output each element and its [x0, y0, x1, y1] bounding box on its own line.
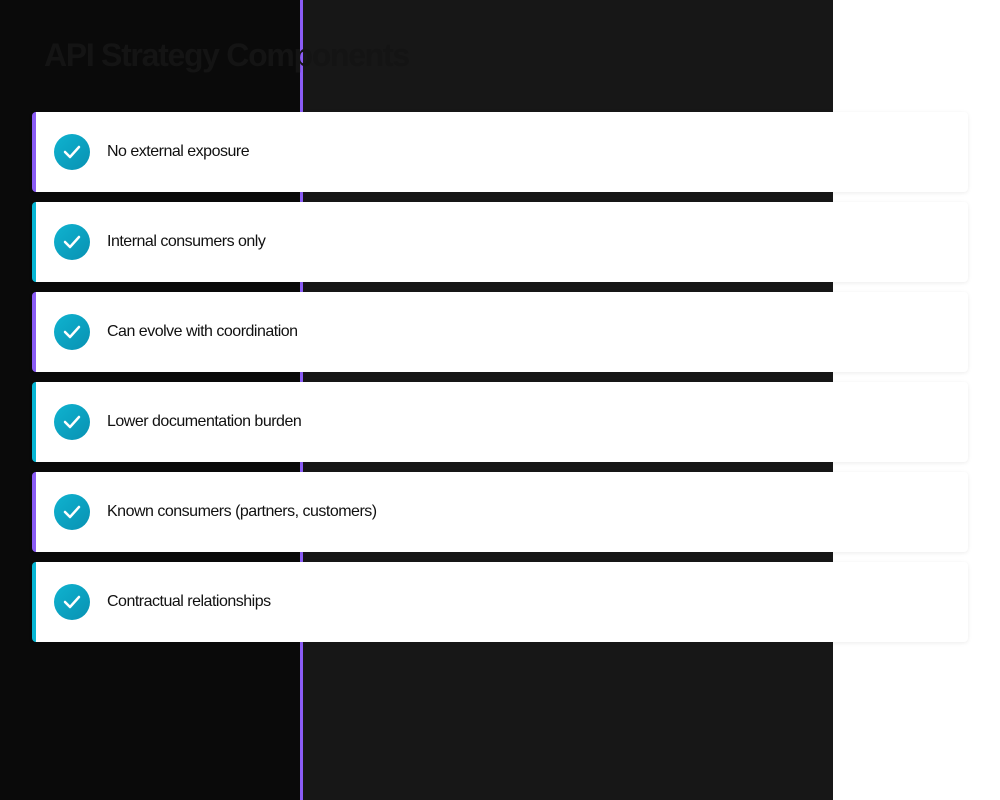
icon: check — [54, 404, 90, 440]
icon: check — [54, 584, 90, 620]
card: no external exposure — [32, 112, 968, 192]
card: internal consumers — [32, 202, 968, 282]
card: documentation — [32, 382, 968, 462]
title: API Strategy Components — [44, 37, 409, 73]
icon: check — [54, 494, 90, 530]
card: internal consumers: Internal consumers only — [107, 233, 265, 250]
icon: check — [54, 314, 90, 350]
card: evolve: Can evolve with coordination — [107, 323, 298, 340]
icon: check — [54, 224, 90, 260]
card: known consumers — [32, 472, 968, 552]
card: contractual — [32, 562, 968, 642]
card: known consumers: Known consumers (partners, customers) — [107, 503, 377, 520]
card: contractual: Contractual relationships — [107, 593, 271, 610]
card: documentation: Lower documentation burden — [107, 413, 301, 430]
card: no external exposure: No external exposure — [107, 143, 249, 160]
card: evolve — [32, 292, 968, 372]
icon: check — [54, 134, 90, 170]
